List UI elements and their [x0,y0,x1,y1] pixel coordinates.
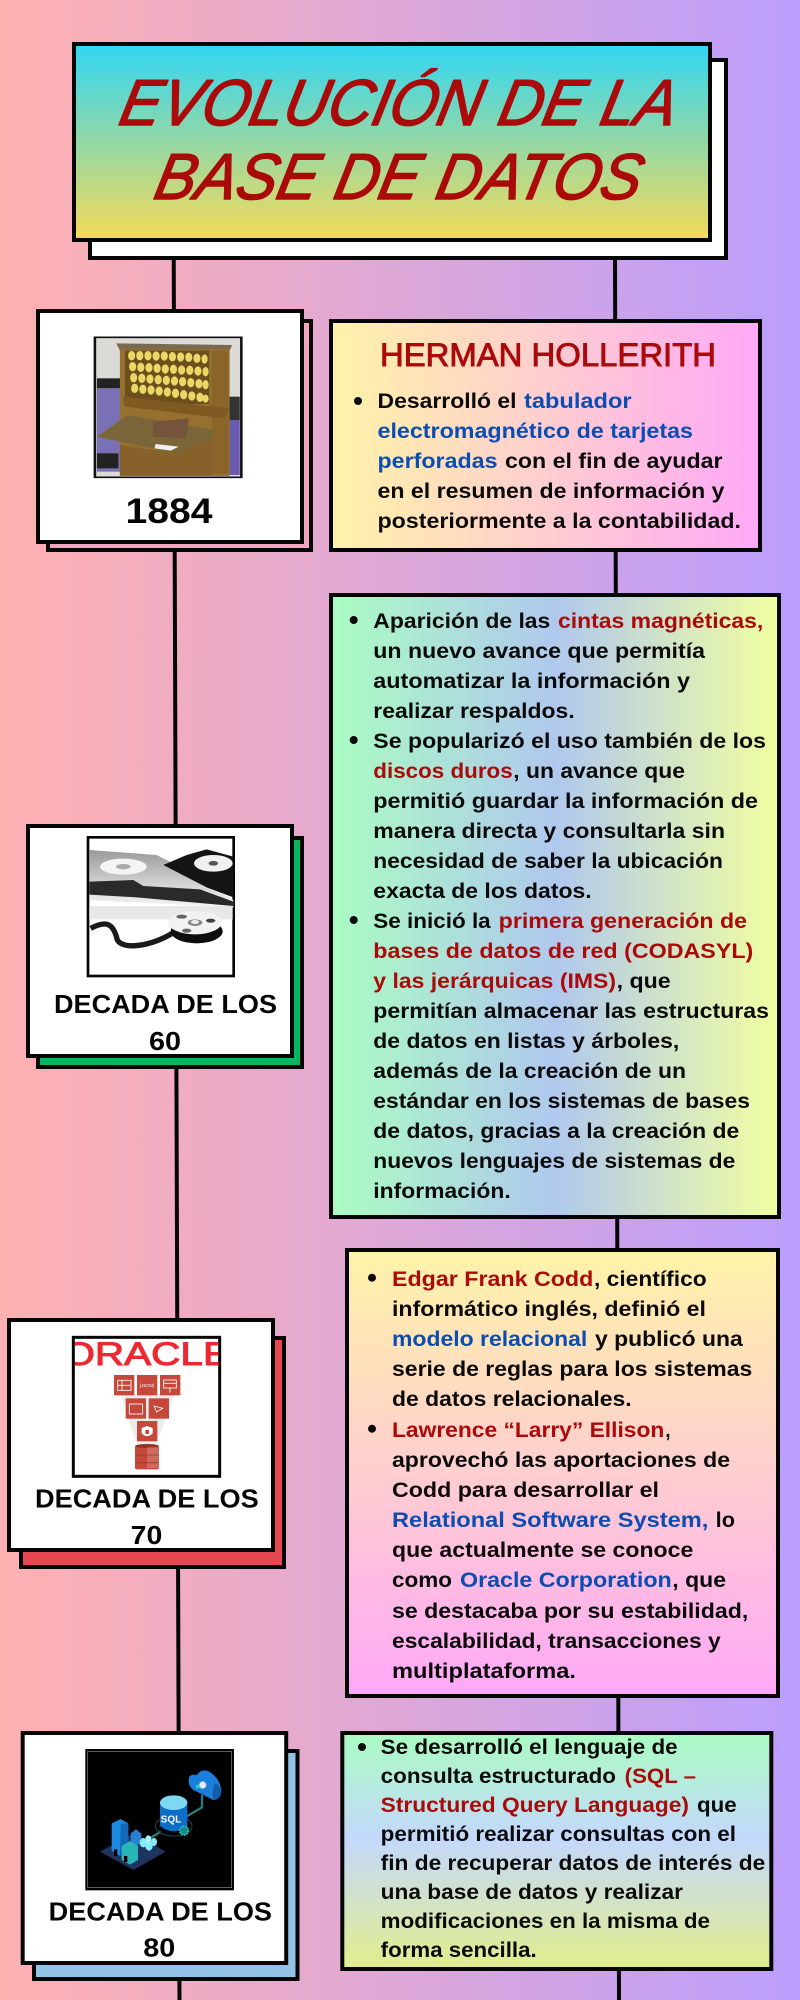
bullet text: consulta estructurado [381,1765,616,1788]
bullet text: electromagnético de tarjetas [378,420,693,443]
card shadow [38,838,302,1067]
bullet text: , un avance que [513,760,685,783]
image: Oracle database: {JSON} [140,1383,155,1388]
decade label [54,989,277,1056]
bullet text: permitió realizar consultas con el [381,1823,736,1846]
card front [28,826,292,1056]
card front [9,1320,273,1550]
bullet text: , que [617,970,671,993]
bullet text: que actualmente se conoce [392,1539,693,1562]
bullet text: necesidad de saber la ubicación [373,850,723,873]
bullet text: perforadas [378,450,498,473]
bullet text: además de la creación de un [373,1060,686,1083]
bullet text [368,1268,752,1683]
bullet text: de datos relacionales. [392,1388,632,1411]
bullet text: lo [716,1509,735,1532]
bullet text: discos duros [373,760,513,783]
image: Oracle database: ORACLE [63,1335,230,1372]
card: 1884 [38,311,311,550]
bullet text: (SQL – [625,1765,696,1788]
bullet text: de datos en listas y árboles, [373,1030,679,1053]
bullet text: permitió guardar la información de [373,790,758,813]
bullet text: modificaciones en la misma de [381,1910,710,1933]
timeline line: left [174,250,180,2000]
image: SQL server illustration [85,1749,234,1890]
bullet text: Se popularizó el uso también de los [373,730,766,753]
bullet text: forma sencilla. [381,1939,537,1962]
decade label: DECADA DE LOS [35,1484,259,1514]
bullet text: Codd para desarrollar el [392,1479,659,1502]
bullet text: nuevos lenguajes de sistemas de [373,1150,735,1173]
title panel [74,44,726,258]
card front [23,1733,286,1963]
bullet text: información. [373,1180,511,1203]
bullet text: , científico [594,1268,707,1291]
bullet text: Edgar Frank Codd [392,1268,593,1291]
bullet text: fin de recuperar datos de interés de [381,1852,765,1875]
bullet text: y publicó una [595,1328,743,1351]
image: magnetic tape reels [88,837,234,976]
decade label: DECADA DE LOS [49,1897,272,1927]
bullet text: bases de datos de red (CODASYL) [373,940,753,963]
bullet text: de datos, gracias a la creación de [373,1120,739,1143]
title text: BASE DE DATOS [149,140,651,213]
panel: Codd and Ellison [347,1250,778,1696]
bullet text: como [392,1569,452,1592]
bullet text: Relational Software System, [392,1509,708,1532]
panel: magnetic tapes and hard disks [331,595,779,1217]
bullet text: aprovechó las aportaciones de [392,1449,730,1472]
card front [38,311,302,542]
timeline line: right [615,250,619,2000]
bullet text: Oracle Corporation [460,1569,672,1592]
bullet text: exacta de los datos. [373,880,592,903]
bullet text: tabulador [524,390,632,413]
bullet text: Desarrolló el [378,390,516,413]
bullet text: realizar respaldos. [373,700,575,723]
bullet text: y las jerárquicas (IMS) [373,970,616,993]
bullet text: serie de reglas para los sistemas [392,1358,752,1381]
title text: EVOLUCIÓN DE LA [114,66,686,139]
bullet text: primera generación de [499,910,747,933]
title card [74,44,710,240]
card shadow [34,1751,298,1979]
bullet text: manera directa y consultarla sin [373,820,725,843]
bullet text: un nuevo avance que permitía [373,640,705,663]
year label: 1884 [126,492,213,531]
bullet text: , que [672,1569,726,1592]
bullet text: modelo relacional [392,1328,587,1351]
bullet text: que [697,1794,737,1817]
card: decade of the 60s [28,826,302,1067]
bullet text: permitían almacenar las estructuras [373,1000,769,1023]
image: tabulator machine [95,337,241,477]
bullet text: estándar en los sistemas de bases [373,1090,750,1113]
image: SQL server illustration: SQL [161,1814,181,1825]
bullet text: posteriormente a la contabilidad. [378,510,741,533]
bullet text: Se inició la [373,910,491,933]
title shadow card [90,60,726,258]
card shadow [21,1338,284,1567]
bullet text: multiplataforma. [392,1660,576,1683]
decade label: 80 [143,1933,175,1963]
panel: SQL language [342,1733,771,1969]
card: decade of the 70s [9,1320,284,1567]
decade label [49,1897,272,1963]
bullet text: Lawrence “Larry” Ellison [392,1419,664,1442]
decade label: 60 [149,1026,181,1056]
bullet text: , [665,1419,671,1442]
decade label [35,1484,259,1550]
bullet text [358,1736,765,1962]
bullet text: informático inglés, definió el [392,1298,706,1321]
image: Oracle database [63,1335,230,1476]
panel: Herman Hollerith [331,321,760,550]
bullet text: automatizar la información y [373,670,690,693]
decade label: 70 [131,1520,162,1550]
bullet text [354,390,741,533]
bullet text: se destacaba por su estabilidad, [392,1600,748,1623]
bullet text: Structured Query Language) [381,1794,689,1817]
decade label: DECADA DE LOS [54,989,277,1019]
bullet text [350,610,769,1203]
bullet text: una base de datos y realizar [381,1881,683,1904]
card shadow [48,321,311,550]
bullet text: escalabilidad, transacciones y [392,1630,721,1653]
bullet text: Aparición de las [373,610,550,633]
bullet text: cintas magnéticas, [558,610,763,633]
heading: HERMAN HOLLERITH [380,337,716,373]
bullet text: en el resumen de información y [378,480,725,503]
bullet text: Se desarrolló el lenguaje de [381,1736,678,1759]
title text [114,66,686,213]
bullet text: con el fin de ayudar [505,450,722,473]
card: decade of the 80s [23,1733,297,1979]
